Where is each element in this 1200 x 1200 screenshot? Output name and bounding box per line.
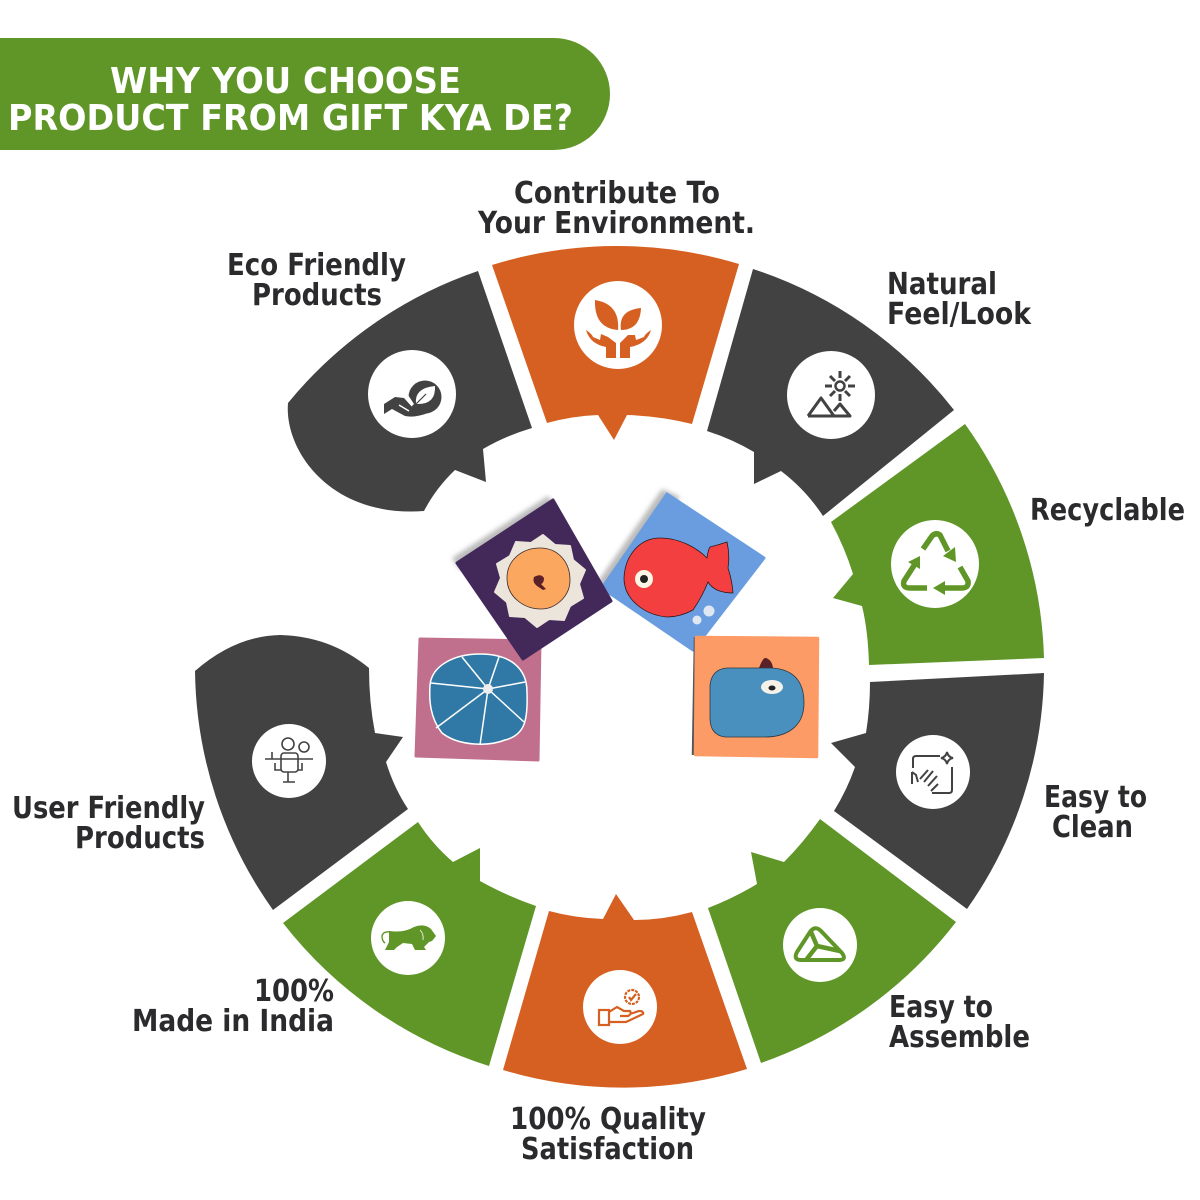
panel: contribute to your environment [492,246,739,440]
icon: triangular puzzle [796,928,844,960]
panel: quality satisfaction [503,894,747,1088]
label: contribute to your environment: Contribute To [514,176,720,211]
label: eco friendly products: Eco Friendly [227,248,406,283]
label: quality satisfaction: Satisfaction [521,1132,694,1167]
title banner: WHY YOU CHOOSE [110,61,461,102]
label: made in india: Made in India [132,1004,334,1039]
photo: blue fish puzzle card [595,489,764,650]
photo: orange whale puzzle card [693,637,818,757]
label: natural feel/look: Natural [887,267,997,302]
label: quality satisfaction [510,1102,706,1167]
label: user friendly products: User Friendly [12,791,205,826]
label: easy to assemble: Easy to [889,990,993,1025]
label: contribute to your environment: Your Environment. [477,206,755,241]
panel: easy to assemble [708,819,956,1063]
label: user friendly products: Products [75,821,205,856]
icon: hand holding leaf [384,380,442,417]
label: easy to clean: Clean [1052,810,1133,845]
icon: person at desk [265,738,313,782]
label: made in india: 100% [254,974,334,1009]
label: user friendly products [12,791,205,856]
icon: hand with badge [599,990,643,1025]
icon: sun and mountains [808,371,855,416]
icon: hands with sprout [586,300,651,358]
label: natural feel/look [887,267,1032,332]
label: quality satisfaction: 100% Quality [510,1102,706,1137]
label: natural feel/look: Feel/Look [887,297,1032,332]
panel: natural feel/look [707,269,954,516]
label: eco friendly products: Products [252,278,382,313]
label: easy to clean: Easy to [1044,780,1147,815]
label: eco friendly products [227,248,406,313]
icon: lion [382,925,436,950]
photo: pink puzzle card [416,639,540,760]
panel: easy to clean [831,673,1044,909]
panel: user friendly products [195,635,408,910]
label: contribute to your environment [477,176,755,241]
photo: purple sun puzzle card [452,496,611,659]
label: made in india [132,974,334,1039]
panel: recyclable [831,424,1044,665]
title banner: PRODUCT FROM GIFT KYA DE? [8,98,573,139]
label: easy to assemble [889,990,1030,1055]
label: easy to assemble: Assemble [889,1020,1030,1055]
icon: recycling arrows [904,534,968,595]
label: easy to clean [1044,780,1147,845]
panel: eco friendly products [288,271,532,512]
icon: hand wiping surface [912,752,953,793]
panel: made in india [283,822,536,1066]
title banner [0,38,610,150]
